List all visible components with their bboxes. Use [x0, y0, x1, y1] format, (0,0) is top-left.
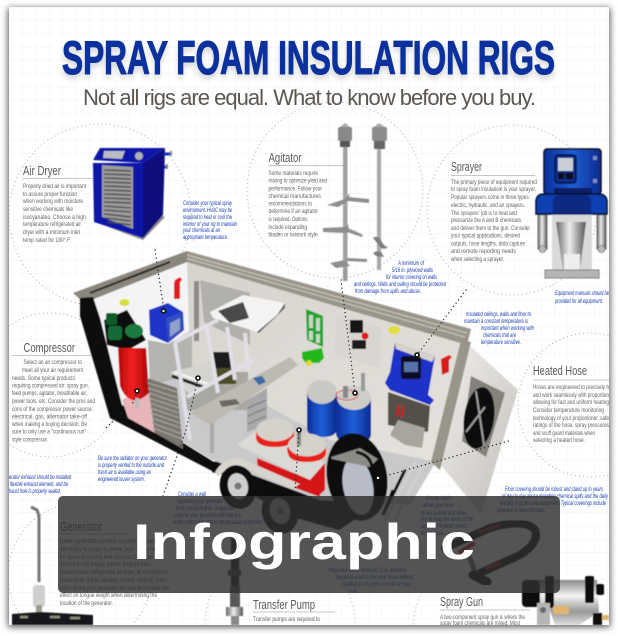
panel: heated hose text: selecting a heated hose.: [533, 437, 585, 444]
panel: agitator text: blades or twistork style.: [268, 232, 319, 238]
dotted circle: heated hose: [518, 333, 608, 477]
panel: compressor text: cons of the compressor power source:: [12, 406, 93, 413]
panel: sprayer text: The sprayers' job is to heat and: [451, 210, 517, 217]
callout: hose hatch: to run outside and allow: [421, 510, 466, 517]
panel: sprayer text: and deliver them to the gun. Consider: [451, 225, 531, 232]
callout: hose rack: should be used to hold your hoses without: [336, 574, 413, 581]
callout: work area: separating your generator: [177, 498, 224, 505]
callout: insulation: temperature sensitive.: [481, 339, 521, 346]
workbench: [190, 357, 298, 453]
callout: work area: better control the interior temperatures and noise.: [173, 519, 263, 526]
panel: generator text: location of the generator.: [60, 600, 113, 607]
callout: radiator: fresh air is available using an: [98, 469, 151, 476]
callout: exhaust: [9, 474, 71, 495]
callout: wall covering: [354, 260, 446, 295]
icon: agitators: [323, 123, 388, 281]
callout: hose hatch: A hose hatch: [425, 495, 451, 502]
icon: roof air conditioner: [210, 295, 285, 333]
callout: insulation: Insulated ceilings, walls and floor to: [466, 311, 531, 318]
panel: compressor text: needs. Some typical products: [12, 375, 76, 382]
panel: generator text: [59, 519, 169, 607]
callout: work area: [173, 491, 263, 526]
leader lines: [104, 250, 512, 496]
icon: small compressor: [104, 310, 149, 408]
panel: air dryer text: dryer with a minimum inlet: [23, 229, 80, 236]
panel: compressor text: sure to only use a "continuous run": [12, 428, 86, 436]
panel: compressor text: Select an air compressor to: [24, 359, 82, 366]
trailer lower chassis: [211, 460, 354, 530]
callout: HVAC: required to heat or cool the: [183, 214, 232, 221]
equipment in bay: [170, 352, 248, 410]
black front edge: [80, 297, 216, 473]
callout: floor covering: polyurea or diamond plate.: [496, 507, 545, 514]
panel: agitator text: Some materials require: [268, 170, 318, 177]
icon: extinguisher left: [174, 277, 182, 299]
panel: agitator text: mixing to optimize yield and: [268, 178, 327, 184]
panel: sprayer text: Popular sprayers come in three types:: [451, 194, 530, 201]
panel: transfer pump text: Transfer Pump: [253, 597, 315, 612]
panel: transfer pump text: Transfer pumps are required to: [253, 616, 320, 623]
callout: work area: Consider a wall: [178, 491, 206, 498]
icon: spray gun: [522, 576, 609, 625]
white frame posts: [175, 320, 253, 440]
panel: sprayer text: outputs, hose lengths, data capture: [451, 240, 525, 248]
panel: compressor text: when making a buying decision. Be: [11, 421, 87, 428]
callout: insulation: maintain a constant temperature is: [464, 318, 528, 325]
red extinguisher right: [441, 355, 452, 375]
panel: spray gun text: [440, 594, 530, 627]
panel: agitator text: chemical manufactures: [268, 193, 322, 200]
callout: radiator: engineered louver system.: [98, 476, 145, 483]
callout: hose hatch: temperature.: [421, 530, 445, 537]
yellow light left: [120, 299, 130, 306]
subtitle: Not all rigs are equal. What to know before you buy.: [83, 85, 536, 110]
green bottle rack and tank: [302, 309, 324, 366]
panel: spray gun text: spray foam chemicals are mixed. Most: [440, 620, 520, 627]
panel: agitator text: performance. Follow your: [268, 186, 323, 192]
callout: hose hatch: allows your hose: [423, 502, 454, 509]
callout: exhaust: flexible exhaust element, and be: [10, 481, 68, 488]
icon: generator with exhaust: [12, 507, 93, 625]
callout: hose rack: [329, 567, 413, 595]
callout: HVAC: Consider your typical spray: [183, 200, 233, 207]
callout: HVAC: environment. HVAC may be: [183, 207, 232, 214]
callout: HVAC: appropriate temperature.: [183, 234, 228, 241]
rear frame struts: [385, 457, 423, 521]
panel: compressor text: meet all your air requirement: [22, 367, 83, 374]
callout: floor covering: [496, 486, 609, 514]
panel: sprayer text: to spray foam insulatioin is your sprayer.: [451, 186, 536, 193]
callout: work area: room for your generator will help you: [174, 512, 241, 519]
panel: sprayer text: your typical applications, desired: [451, 232, 520, 240]
panel: generator text: for years of trouble free service. Consider all: [60, 554, 160, 561]
panel: generator text: heated hoses, refrigerated air dryer, air compressor,: [60, 569, 169, 576]
dotted circle: compressor: [9, 313, 122, 457]
title: [62, 40, 556, 81]
panel: air dryer text: to assure proper function: [23, 191, 77, 198]
illustration: rig cutaway: [73, 251, 518, 538]
callout: hose hatch: you to keep the doors of the: [420, 516, 473, 523]
callout: hose rack: creating pinch points or kinks on your: [342, 581, 412, 588]
panel: generator text: effect on tongue weight when determining the: [60, 592, 157, 599]
panel: air dryer text: isocyanates. Choose a high: [23, 214, 86, 221]
callout: insulation: [464, 311, 534, 346]
panel: agitator text: Agitator: [268, 150, 302, 165]
icon: heated hose: [445, 523, 536, 582]
wall panel with controls: [335, 314, 400, 368]
callout: insulation: important when working with: [481, 325, 534, 332]
panel: air dryer text: temperature refrigerated air: [23, 221, 82, 228]
panel: transfer pump text: [253, 597, 335, 623]
callout: insulation: chemicals that are: [483, 332, 516, 339]
panel: air dryer text: Air Dryer: [23, 163, 61, 178]
panel: compressor text: power tools, etc. Consider the pros and: [12, 398, 95, 405]
icon: small air dryer: [148, 303, 192, 385]
callout: wall covering: 5/16 in. plywood walls: [392, 267, 433, 274]
panel: compressor text: Compressor: [24, 340, 75, 355]
panel: generator text: power tools, lights, auxiliary outlets, heat/AC units,: [60, 577, 167, 584]
panel: sprayer text: pressurize the A and B chemicals: [451, 217, 521, 224]
trailer floor: [122, 378, 434, 504]
panel: sprayer text: The primary piece of equipment required: [451, 179, 537, 186]
callout: HVAC: [182, 200, 237, 241]
panel: spray gun text: Spray Gun: [440, 594, 483, 609]
panel: generator text: items that will require power: proportioner,: [60, 561, 150, 568]
callout: hose rack: hose.: [349, 588, 358, 595]
callout: wall covering: and ceilings. Walls and ceiling should be protected: [354, 281, 446, 288]
panel: agitator text: recommendations to: [268, 200, 312, 208]
right door open: [431, 340, 518, 514]
panel: air dryer text: [22, 163, 93, 244]
panel: generator text: when sizing your generator. Be sure to consider the: [59, 585, 169, 592]
panel: air dryer text: temp rated for 180° F.: [23, 236, 71, 244]
callout: radiator: is properly vented to the outside and: [98, 462, 164, 469]
callout: wall covering: A minimum of: [397, 260, 425, 267]
panel: air dryer text: when working with moisture: [22, 198, 83, 205]
callout: HVAC: interior of your rig to maintain: [183, 221, 237, 228]
callout: HVAC: your chemicals at an: [182, 227, 220, 234]
dotted circle: generator: [8, 503, 152, 622]
panel: sprayer text: when selecting a sprayer.: [450, 256, 504, 263]
dotted circle: sprayer: [427, 125, 597, 295]
roof rails: [73, 251, 471, 345]
dotted circle: transfer pump: [205, 549, 355, 624]
icon: air dryer: [93, 148, 171, 240]
callout: hose rack: Hose rack with a minimum 15 in. diameter: [329, 567, 407, 574]
callout: wall covering: from damage from spills and abuse.: [355, 288, 421, 295]
panel: compressor text: electrical, gas, alternator take-off: [12, 414, 87, 420]
banner text: Infographic: [133, 514, 475, 570]
callout: hose hatch: rig closed for better interior: [421, 523, 468, 530]
callout: work area: from your work area. A separate: [176, 505, 234, 512]
dotted circle: spray gun: [413, 548, 577, 624]
callout: radiator: Be sure the radiator on your generator: [98, 455, 168, 462]
callout: wall covering: for interior covering on walls: [386, 274, 437, 281]
panel: sprayer text: electric, hydraulic, and air sprayers.: [451, 202, 525, 209]
louver door: [147, 378, 183, 449]
dotted circle: agitator: [247, 102, 423, 278]
wheels: [215, 458, 303, 538]
panel: sprayer text: and remote reporting needs: [451, 248, 517, 255]
hose rack tire: [320, 428, 394, 526]
panel: generator text: Generator: [60, 519, 102, 534]
panel: spray gun text: A two-component spray gun is where the: [440, 614, 525, 621]
panel: agitator text: determine if an agitator: [268, 208, 319, 215]
callout: exhaust: haust hole is properly sealed.: [9, 488, 61, 495]
panel: heated hose text: [533, 363, 610, 444]
blue sprayer in rig: [385, 343, 435, 448]
icon: transfer pump: [226, 536, 243, 625]
infographic banner background: [58, 496, 560, 593]
panel: compressor text: requiring compressed air: spray gun,: [12, 382, 89, 390]
red platform and drums: [237, 418, 326, 497]
marker dots: [135, 309, 419, 480]
callout: radiator: [98, 455, 168, 483]
dotted circle: air dryer: [9, 124, 191, 306]
blue drums: [307, 373, 371, 443]
panel: agitator text: include expanding: [268, 224, 307, 231]
panel: generator text: Diesel generators provide consistent, clean: [60, 538, 155, 545]
panel: air dryer text: sensitive chemicals like: [23, 206, 73, 213]
panel: air dryer text: Properly dried air is important: [23, 183, 86, 190]
front wall: [92, 264, 188, 406]
panel: compressor text: feed pumps, agitator, breathable air,: [12, 390, 87, 397]
callout: exhaust: erator exhaust should be installed: [9, 474, 71, 481]
back wall: [187, 262, 462, 462]
pink floor patch: [122, 392, 156, 434]
panel: compressor text: style compressor.: [12, 436, 48, 444]
callout: manuals: [554, 290, 609, 305]
panel: agitator text: is required. Options: [268, 216, 308, 223]
panel: heated hose text: Heated Hose: [533, 363, 587, 378]
icon: sprayer: [536, 149, 607, 278]
panel: compressor text: [11, 340, 100, 444]
window panel on back wall: [200, 280, 250, 345]
panel: sprayer text: Sprayer: [451, 159, 482, 174]
panel: generator text: electricity to properly power your equipment: [60, 546, 160, 553]
panel: agitator text: [268, 150, 345, 238]
panel: sprayer text: [450, 159, 537, 263]
callout: hose hatch: [420, 495, 473, 537]
